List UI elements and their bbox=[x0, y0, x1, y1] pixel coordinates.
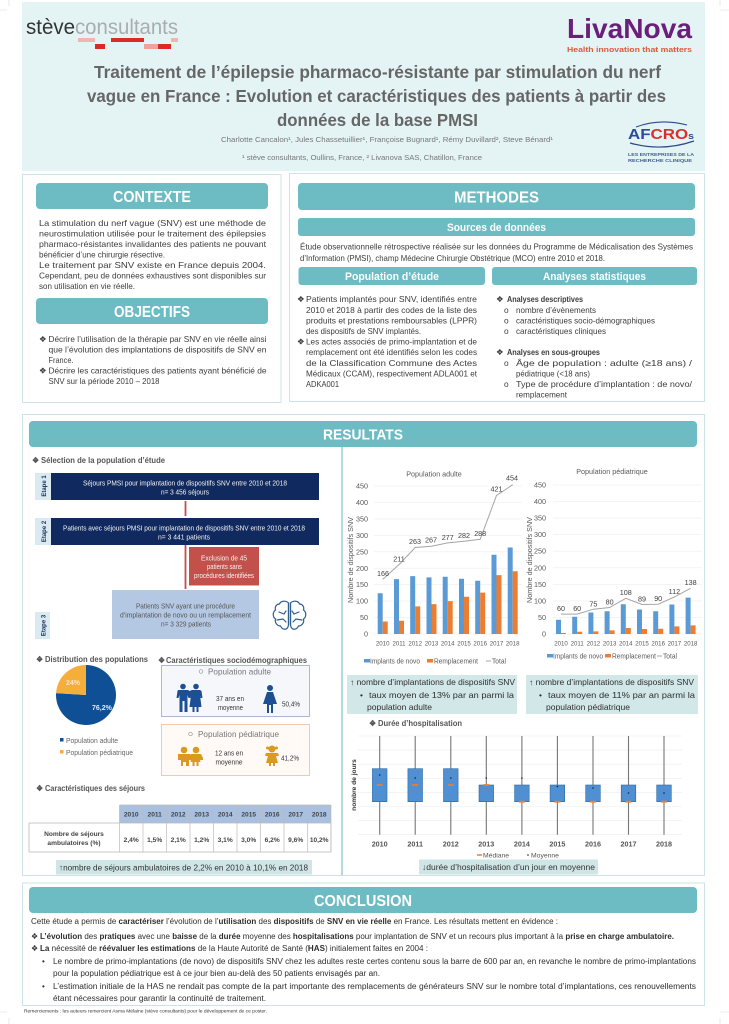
text: population d'etude: de la Classification Commune des Actes bbox=[306, 358, 477, 368]
heading: methodes: METHODES bbox=[454, 190, 539, 206]
line: total pediatrique: 90 bbox=[654, 594, 662, 603]
logo: steve consultants: consultants bbox=[75, 16, 178, 39]
text: part femmes adulte: 50,4% bbox=[282, 700, 301, 708]
whiskers bbox=[380, 736, 664, 835]
means bbox=[379, 774, 665, 794]
logo: steve consultants: stève bbox=[26, 16, 75, 39]
label: etape 2 bbox=[35, 518, 51, 545]
chart: duree d'hospitalisation bbox=[351, 719, 682, 860]
chart: population adulte: 2010 bbox=[376, 640, 390, 648]
text: age moyen adulte bbox=[216, 694, 244, 712]
legend: boxplot bbox=[477, 852, 559, 860]
chart: population adulte: 2018 bbox=[506, 640, 520, 648]
title: données de la base PMSI bbox=[277, 110, 478, 130]
table: caracteristiques des sejours: ❖ bbox=[36, 784, 43, 793]
chart: population pediatrique bbox=[525, 467, 702, 660]
icon: fille bbox=[265, 746, 279, 766]
table: caracteristiques des sejours: 3,0% bbox=[241, 837, 256, 844]
text: objectifs: Décrire l’utilisation de la thérapie par SNV en vie réelle ainsi bbox=[48, 334, 267, 344]
chart: population pediatrique: 350 bbox=[534, 514, 546, 522]
chart: population pediatrique: 2017 bbox=[668, 640, 682, 648]
pie slice: pediatrique: 24% bbox=[66, 680, 81, 687]
legend: pie: Population adulte bbox=[66, 736, 118, 745]
line: total pediatrique: 112 bbox=[669, 587, 680, 596]
bars: remplacement adulte bbox=[383, 571, 518, 634]
text: objectifs: SNV sur la période 2010 – 2018 bbox=[48, 376, 160, 386]
chart: population adulte: 2011 bbox=[392, 640, 406, 648]
text: analyses statistiques: o bbox=[504, 358, 509, 368]
text: population d'etude: des dispositifs de SNV implantés. bbox=[306, 326, 421, 336]
chart: distribution des populations: ❖ bbox=[36, 655, 43, 664]
chart: duree d'hospitalisation: 2015 bbox=[549, 840, 565, 848]
box: etape 1 bbox=[51, 473, 319, 500]
text: conclusion 2: La nécessité de réévaluer les estimations de la Haute Autorité de Santé (HAS) initialement faites en 2004 : bbox=[40, 944, 428, 953]
text: contexte: pharmaco-résistantes invalidantes des patients ne pouvant bbox=[39, 239, 267, 249]
box: etape 3: Patients SNV ayant une procédure bbox=[136, 602, 235, 610]
line: total adulte: 277 bbox=[442, 533, 454, 542]
text: analyses statistiques: ❖ bbox=[496, 347, 503, 357]
text: population d'etude bbox=[297, 294, 478, 389]
logo: AFCROs: RECHERCHE CLINIQUE bbox=[628, 158, 692, 163]
table: caracteristiques des sejours: 1,5% bbox=[147, 837, 162, 844]
text: age moyen enfants: 12 ans en bbox=[215, 748, 243, 758]
line: total adulte: 263 bbox=[409, 537, 421, 546]
text: age moyen enfants bbox=[215, 748, 243, 766]
text: contexte bbox=[39, 218, 267, 291]
line: total pediatrique: 60 bbox=[573, 604, 581, 613]
callout: implantations adulte: ↑ nombre d’implantations de dispositifs SNV bbox=[350, 677, 515, 687]
text: analyses statistiques: Analyses en sous-groupes bbox=[507, 347, 600, 357]
flowchart: selection de la population: ❖ bbox=[32, 456, 39, 465]
heading: methodes bbox=[298, 183, 695, 210]
text: population d'etude: produits et prestations remboursables (LPPR) bbox=[306, 316, 477, 326]
text: analyses statistiques: Analyses descriptives bbox=[507, 294, 583, 304]
heading: conclusion bbox=[29, 887, 697, 913]
flowchart: selection de la population: Sélection de la population d’étude bbox=[41, 456, 165, 465]
line: total pediatrique: 75 bbox=[589, 600, 597, 608]
table: caracteristiques des sejours: 9,6% bbox=[288, 837, 303, 844]
logo: LivaNova: Health innovation that matters bbox=[567, 45, 692, 54]
table: caracteristiques des sejours: ambulatoires (%) bbox=[47, 840, 101, 847]
text: population d'etude: remplacement ont été identifiés selon les codes bbox=[306, 347, 477, 357]
legend: adulte: Implants de novo bbox=[370, 656, 420, 666]
text: population d'etude: 2010 et 2018 à partir des codes de la liste des bbox=[306, 305, 477, 315]
title: Traitement de l’épilepsie pharmaco-résistante par stimulation du nerf bbox=[94, 62, 661, 82]
chart: duree d'hospitalisation: ❖ bbox=[369, 719, 376, 728]
card: population adulte: Population adulte bbox=[208, 666, 271, 676]
heading: sources de donnees bbox=[298, 218, 695, 236]
line: total pediatrique: 60 bbox=[557, 604, 565, 613]
heading: resultats: RESULTATS bbox=[323, 426, 403, 444]
box: etape 2: n= 3 441 patients bbox=[158, 532, 210, 542]
text: contexte: La stimulation du nerf vague (SNV) est une méthode de bbox=[39, 218, 266, 228]
text: analyses statistiques: caractéristiques socio-démographiques bbox=[516, 316, 655, 326]
table: caracteristiques des sejours: Nombre de séjours bbox=[44, 831, 104, 838]
box: etape 3 bbox=[112, 590, 259, 639]
text: conclusion 2: pour la population pédiatrique est à ce jour bien au-delà des 50 patients envisagés par an. bbox=[53, 969, 380, 978]
table: caracteristiques des sejours: 2,4% bbox=[124, 837, 139, 844]
pie slice: adulte: 76,2% bbox=[92, 705, 113, 712]
box: etape 1: Séjours PMSI pour implantation de dispositifs SNV entre 2010 et 2018 bbox=[83, 478, 287, 488]
section: caracteristiques sociodemographiques: ❖ bbox=[158, 656, 165, 665]
heading: population d'etude: Population d’étude bbox=[345, 271, 439, 283]
chart: population pediatrique: 50 bbox=[538, 613, 546, 622]
text: population d'etude: Patients implantés pour SNV, identifiés entre bbox=[306, 294, 477, 304]
chart: distribution des populations bbox=[36, 655, 148, 757]
legend: pediatrique: Remplacement bbox=[612, 652, 656, 660]
line: total adulte bbox=[377, 474, 518, 579]
logo: LivaNova: LivaNova bbox=[567, 13, 692, 44]
callout: duree d'hospitalisation: ↓durée d’hospitalisation d’un jour en moyenne bbox=[422, 862, 595, 872]
chart: population adulte: 400 bbox=[356, 498, 368, 507]
chart: population adulte: 350 bbox=[356, 514, 368, 524]
callout: implantations pediatrique: ↑ nombre d’implantations de dispositifs SNV bbox=[529, 677, 694, 687]
text: analyses statistiques: o bbox=[504, 326, 509, 336]
table: caracteristiques des sejours: 2016 bbox=[265, 812, 280, 818]
chart: duree d'hospitalisation: 2017 bbox=[620, 840, 636, 848]
chart: population pediatrique: 200 bbox=[534, 563, 546, 572]
line: total pediatrique: 138 bbox=[685, 578, 697, 587]
table: caracteristiques des sejours: 2,1% bbox=[171, 837, 186, 844]
legend: boxplot: Médiane bbox=[483, 852, 509, 860]
box: etape 2: Patients avec séjours PMSI pour implantation de dispositifs SNV entre 2010 et 2018 bbox=[63, 524, 305, 532]
chart: population pediatrique: 2012 bbox=[587, 640, 601, 648]
text: conclusion 2: étant nécessaires pour garantir la continuité de traitement. bbox=[53, 994, 266, 1003]
text: population d'etude: ❖ bbox=[297, 294, 304, 304]
box: exclusion: Exclusion de 45 bbox=[201, 554, 247, 562]
text: analyses statistiques bbox=[496, 294, 693, 400]
arrow: etape 2 to 3 bbox=[184, 545, 186, 589]
label: etape 3: Etape 3 bbox=[42, 614, 48, 636]
text: part filles: 41,2% bbox=[281, 754, 300, 762]
table: caracteristiques des sejours: 2014 bbox=[218, 812, 233, 818]
box: etape 2 bbox=[51, 518, 319, 545]
text: objectifs: ❖ bbox=[39, 366, 46, 376]
label: etape 1 bbox=[35, 473, 51, 500]
text: sources de donnees: d’Information (PMSI), champ Médecine Chirurgie Obstétrique (MCO) entre 2010 et 2018. bbox=[300, 253, 605, 263]
logo: AFCROs: LES ENTREPRISES DE LA bbox=[628, 152, 695, 157]
table: caracteristiques des sejours: 2013 bbox=[194, 812, 209, 818]
chart: population pediatrique: 0 bbox=[542, 630, 546, 638]
chart: population adulte: 250 bbox=[356, 548, 368, 556]
text: contexte: son utilisation en vie réelle. bbox=[39, 281, 135, 291]
line: total pediatrique: 108 bbox=[620, 588, 632, 597]
text: objectifs bbox=[39, 334, 267, 386]
callout: sejours ambulatoires: ↑nombre de séjours ambulatoires de 2,2% en 2010 à 10,1% en 2018 bbox=[59, 862, 308, 872]
text: analyses statistiques: o bbox=[504, 379, 509, 389]
chart: duree d'hospitalisation: 2014 bbox=[514, 840, 530, 848]
text: analyses statistiques: o bbox=[504, 305, 509, 315]
affiliations: ¹ stève consultants, Oullins, France, ² Livanova SAS, Chatillon, France bbox=[242, 153, 482, 162]
text: conclusion 2: Le nombre de primo-implantations (de novo) de dispositifs SNV chez les adultes reste certes contenu sous la barre de 600 par an, en revanche le nombre de primo-implantations bbox=[53, 957, 696, 966]
line: total adulte: 282 bbox=[458, 531, 470, 540]
table: caracteristiques des sejours: 3,1% bbox=[218, 837, 233, 844]
table: caracteristiques des sejours: Caractéristiques des séjours bbox=[45, 784, 145, 793]
callout: implantations pediatrique bbox=[526, 675, 698, 714]
text: population d'etude: ❖ bbox=[297, 336, 304, 346]
table: caracteristiques des sejours: 6,2% bbox=[265, 837, 280, 844]
text: conclusion 1: ❖ bbox=[31, 932, 38, 941]
panel: header banner bbox=[22, 2, 705, 171]
line: total pediatrique bbox=[557, 578, 697, 614]
text: analyses statistiques: caractéristiques cliniques bbox=[516, 326, 606, 336]
callout: sejours ambulatoires bbox=[56, 860, 312, 874]
section: caracteristiques sociodemographiques bbox=[158, 656, 310, 776]
legend: pediatrique: Total bbox=[663, 652, 677, 660]
panel: resultats bbox=[22, 414, 704, 876]
chart: population adulte: 50 bbox=[360, 613, 368, 622]
chart: population pediatrique: 2016 bbox=[651, 640, 666, 648]
chart: population adulte: 2017 bbox=[490, 640, 504, 648]
chart: population adulte: Population adulte bbox=[406, 470, 462, 478]
text: remerciements: Remerciements : les auteurs remercient Asma Mélaine (stève consultants) pour le développement de ce poster. bbox=[24, 1008, 267, 1014]
chart: population pediatrique: 2011 bbox=[571, 640, 584, 648]
legend: adulte bbox=[364, 656, 506, 666]
legend: pie bbox=[60, 736, 133, 757]
legend: pie: Population pédiatrique bbox=[66, 748, 133, 757]
callout: implantations pediatrique: population pédiatrique bbox=[546, 702, 630, 712]
chart: population pediatrique: 250 bbox=[534, 547, 546, 556]
chart: population adulte: 450 bbox=[356, 482, 368, 490]
text: conclusion 1: L’évolution des pratiques avec une baisse de la durée moyenne des hospitalisations pour implantation de SNV et un recours plus important à la prise en charge ambulatoire. bbox=[40, 932, 674, 941]
chart: population pediatrique: 2010 bbox=[554, 640, 568, 648]
callout: duree d'hospitalisation bbox=[419, 860, 598, 874]
text: conclusion 2 bbox=[31, 944, 696, 1003]
chart: population adulte: 200 bbox=[356, 564, 368, 573]
flowchart: selection de la population bbox=[32, 456, 319, 639]
heading: analyses statistiques: Analyses statistiques bbox=[543, 271, 646, 283]
label: etape 1: Etape 1 bbox=[42, 475, 48, 497]
card: population adulte bbox=[162, 666, 310, 716]
card: population pediatrique bbox=[162, 724, 310, 776]
bars: implants de novo pediatrique bbox=[556, 598, 691, 634]
card: population pediatrique: Population pédiatrique bbox=[198, 729, 279, 739]
icon: brain bbox=[273, 601, 306, 629]
text: analyses statistiques: pédiatrique (<18 ans) bbox=[516, 368, 590, 378]
authors: Charlotte Cancalon¹, Jules Chassetuillier¹, Françoise Bugnard¹, Rémy Duvillard², Steve Bénard¹ bbox=[221, 135, 554, 144]
chart: population pediatrique: 300 bbox=[534, 530, 546, 539]
text: sources de donnees: Étude observationnelle rétrospective réalisée sur les données du Programme de Médicalisation des Systèmes bbox=[300, 242, 693, 252]
panel: conclusion bbox=[22, 883, 704, 1006]
text: objectifs: ❖ bbox=[39, 334, 46, 344]
chart: duree d'hospitalisation: 2011 bbox=[407, 840, 423, 848]
chart: population pediatrique: 2014 bbox=[619, 640, 633, 648]
table: caracteristiques des sejours bbox=[29, 784, 331, 852]
line: total adulte: 421 bbox=[490, 484, 502, 494]
text: contexte: Le traitement par SNV existe en France depuis 2004. bbox=[39, 260, 266, 270]
panel: contexte et objectifs bbox=[22, 174, 281, 402]
line: total pediatrique: 89 bbox=[638, 594, 646, 604]
text: objectifs: Décrire les caractéristiques des patients ayant bénéficié de bbox=[48, 366, 267, 376]
table: caracteristiques des sejours: 10,2% bbox=[310, 837, 329, 844]
box: exclusion: patients sans bbox=[207, 562, 242, 571]
text: contexte: Cependant, peu de données exhaustives sont disponibles sur bbox=[39, 270, 266, 280]
text: analyses statistiques: nombre d’évènements bbox=[516, 305, 596, 315]
text: analyses statistiques: Type de procédure d’implantation : de novo/ bbox=[516, 379, 693, 389]
callout: implantations pediatrique: • bbox=[539, 690, 542, 700]
chart: population pediatrique: 450 bbox=[534, 480, 546, 490]
heading: resultats bbox=[29, 421, 697, 447]
text: conclusion 2: ❖ bbox=[31, 944, 38, 953]
arrow: etape 1 to 2 bbox=[184, 501, 186, 516]
icon: femme adulte bbox=[263, 685, 277, 713]
heading: contexte: CONTEXTE bbox=[113, 189, 191, 206]
text: population d'etude: Les actes associés de primo-implantation et de bbox=[306, 336, 477, 346]
icon: couple adulte bbox=[176, 684, 202, 712]
text: analyses statistiques: Âge de population : adulte (≥18 ans) / bbox=[516, 358, 693, 368]
medians bbox=[377, 785, 667, 802]
table: caracteristiques des sejours: 2018 bbox=[312, 812, 327, 818]
chart: duree d'hospitalisation: 2012 bbox=[443, 840, 459, 848]
legend: pediatrique: Implants de novo bbox=[553, 652, 603, 660]
chart: duree d'hospitalisation: 2016 bbox=[585, 840, 601, 848]
table: caracteristiques des sejours: 2011 bbox=[148, 812, 162, 818]
table: caracteristiques des sejours: 1,2% bbox=[194, 837, 209, 844]
text: age moyen adulte: 37 ans en bbox=[216, 694, 244, 703]
line: total adulte: 267 bbox=[425, 536, 437, 544]
text: contexte: neurostimulation utilisée pour le traitement des épilepsies bbox=[39, 228, 266, 238]
heading: objectifs bbox=[36, 298, 268, 324]
text: conclusion 2: L’estimation initiale de la HAS ne rendait pas compte de la part importante des remplacements de générateurs SNV sur le nombre total d’implantations, ces renouvellements bbox=[53, 982, 696, 991]
text: sources de donnees bbox=[300, 242, 693, 263]
line: total adulte: 211 bbox=[393, 554, 405, 564]
text: population d'etude: ADKA001 bbox=[306, 379, 339, 389]
callout: implantations pediatrique: taux moyen de 11% par an parmi la bbox=[548, 690, 695, 700]
chart: duree d'hospitalisation: 2013 bbox=[478, 840, 494, 848]
chart: population pediatrique: Nombre de dispositifs SNV bbox=[525, 517, 534, 603]
heading: population d'etude bbox=[298, 267, 485, 285]
heading: contexte bbox=[36, 183, 268, 209]
text: analyses statistiques: ❖ bbox=[496, 294, 503, 304]
callout: implantations adulte bbox=[347, 675, 517, 714]
text: objectifs: que l’évolution des implantations de dispositifs de SNV en bbox=[48, 344, 267, 354]
chart: population adulte: 2015 bbox=[457, 640, 471, 648]
chart: population adulte: 0 bbox=[364, 630, 368, 638]
text: age moyen adulte: moyenne bbox=[218, 703, 243, 712]
line: total pediatrique: 80 bbox=[606, 598, 614, 606]
chart: population adulte: 2013 bbox=[425, 640, 439, 648]
box: etape 3: n= 3 329 patients bbox=[161, 620, 211, 628]
chart: duree d'hospitalisation: 2018 bbox=[656, 840, 672, 848]
heading: objectifs: OBJECTIFS bbox=[114, 304, 190, 321]
logo: AFCROs bbox=[628, 122, 695, 163]
section: caracteristiques sociodemographiques: Caractéristiques sociodémographiques bbox=[166, 656, 307, 665]
line: total adulte: 288 bbox=[474, 529, 486, 538]
callout: implantations adulte: population adulte bbox=[367, 702, 432, 712]
chart: duree d'hospitalisation: Durée d’hospitalisation bbox=[378, 719, 462, 728]
table: caracteristiques des sejours: 2017 bbox=[288, 812, 303, 818]
chart: population adulte: 2012 bbox=[408, 640, 423, 648]
box: etape 1: n= 3 456 séjours bbox=[161, 488, 209, 496]
icon: enfants bbox=[178, 747, 203, 766]
text: objectifs: France. bbox=[48, 355, 74, 365]
chart: population adulte: Nombre de dispositifs SNV bbox=[346, 517, 355, 603]
title: vague en France : Evolution et caractéristiques des patients à partir des bbox=[87, 86, 666, 106]
bars: implants de novo adulte bbox=[378, 548, 513, 634]
chart: population adulte: 2014 bbox=[441, 640, 455, 648]
boxes bbox=[372, 769, 671, 802]
text: conclusion 2: • bbox=[42, 957, 45, 966]
text: contexte: bénéficier d’une chirurgie résective. bbox=[39, 250, 165, 260]
line: total adulte: 454 bbox=[506, 474, 518, 482]
chart: population pediatrique: 2013 bbox=[603, 640, 617, 648]
chart: population adulte: 2016 bbox=[473, 640, 488, 648]
text: analyses statistiques: o bbox=[504, 316, 509, 326]
text: analyses statistiques: remplacement bbox=[516, 390, 568, 400]
logo: AFCROs: AFCRO s bbox=[628, 127, 694, 143]
chart: population adulte bbox=[346, 470, 522, 666]
table: caracteristiques des sejours: 2010 bbox=[124, 812, 139, 818]
callout: implantations adulte: • bbox=[360, 690, 363, 700]
callout: implantations adulte: taux moyen de 13% par an parmi la bbox=[369, 690, 514, 700]
chart: population adulte: 300 bbox=[356, 531, 368, 540]
chart: population pediatrique: 100 bbox=[534, 596, 546, 606]
chart: population adulte: 150 bbox=[356, 580, 368, 589]
text: population d'etude: Médicaux (CCAM), respectivement ADLA001 et bbox=[306, 368, 478, 378]
legend: pediatrique bbox=[547, 652, 677, 660]
chart: population pediatrique: Population pédiatrique bbox=[576, 467, 648, 476]
legend: adulte: Remplacement bbox=[434, 656, 478, 666]
line: total adulte: 166 bbox=[377, 569, 389, 578]
title bbox=[87, 62, 666, 130]
chart: population pediatrique: 2015 bbox=[635, 640, 649, 648]
heading: sources de donnees: Sources de données bbox=[447, 222, 546, 234]
chart: population adulte: 100 bbox=[356, 596, 368, 606]
panel: methodes bbox=[290, 174, 704, 402]
chart: population pediatrique: 2018 bbox=[684, 640, 698, 648]
heading: analyses statistiques bbox=[492, 267, 697, 285]
label: etape 2: Etape 2 bbox=[42, 520, 48, 542]
text: age moyen enfants: moyenne bbox=[216, 758, 242, 766]
logo: steve consultants bbox=[26, 16, 178, 49]
chart: duree d'hospitalisation: nombre de jours bbox=[351, 759, 358, 811]
chart: population pediatrique: 150 bbox=[534, 580, 546, 589]
box: exclusion bbox=[189, 547, 259, 586]
label: etape 3 bbox=[35, 612, 50, 639]
legend: adulte: Total bbox=[492, 656, 506, 666]
table: caracteristiques des sejours: 2015 bbox=[241, 812, 256, 818]
chart: population pediatrique: 400 bbox=[534, 497, 546, 506]
box: etape 3: d’implantation de novo ou un remplacement bbox=[120, 610, 251, 620]
chart: duree d'hospitalisation: 2010 bbox=[372, 840, 388, 848]
chart: distribution des populations: Distribution des populations bbox=[45, 655, 148, 664]
table: caracteristiques des sejours: 2012 bbox=[171, 812, 186, 818]
text: conclusion 2: • bbox=[42, 982, 45, 991]
heading: conclusion: CONCLUSION bbox=[314, 893, 412, 910]
bars: remplacement pediatrique bbox=[561, 625, 696, 634]
text: introduction: Cette étude a permis de caractériser l’évolution de l’utilisation des dispositifs de SNV en vie réelle en France. Les résultats mettent en évidence : bbox=[31, 917, 558, 926]
legend: boxplot: Moyenne bbox=[531, 852, 559, 860]
box: exclusion: procédures identifiées bbox=[194, 571, 254, 580]
